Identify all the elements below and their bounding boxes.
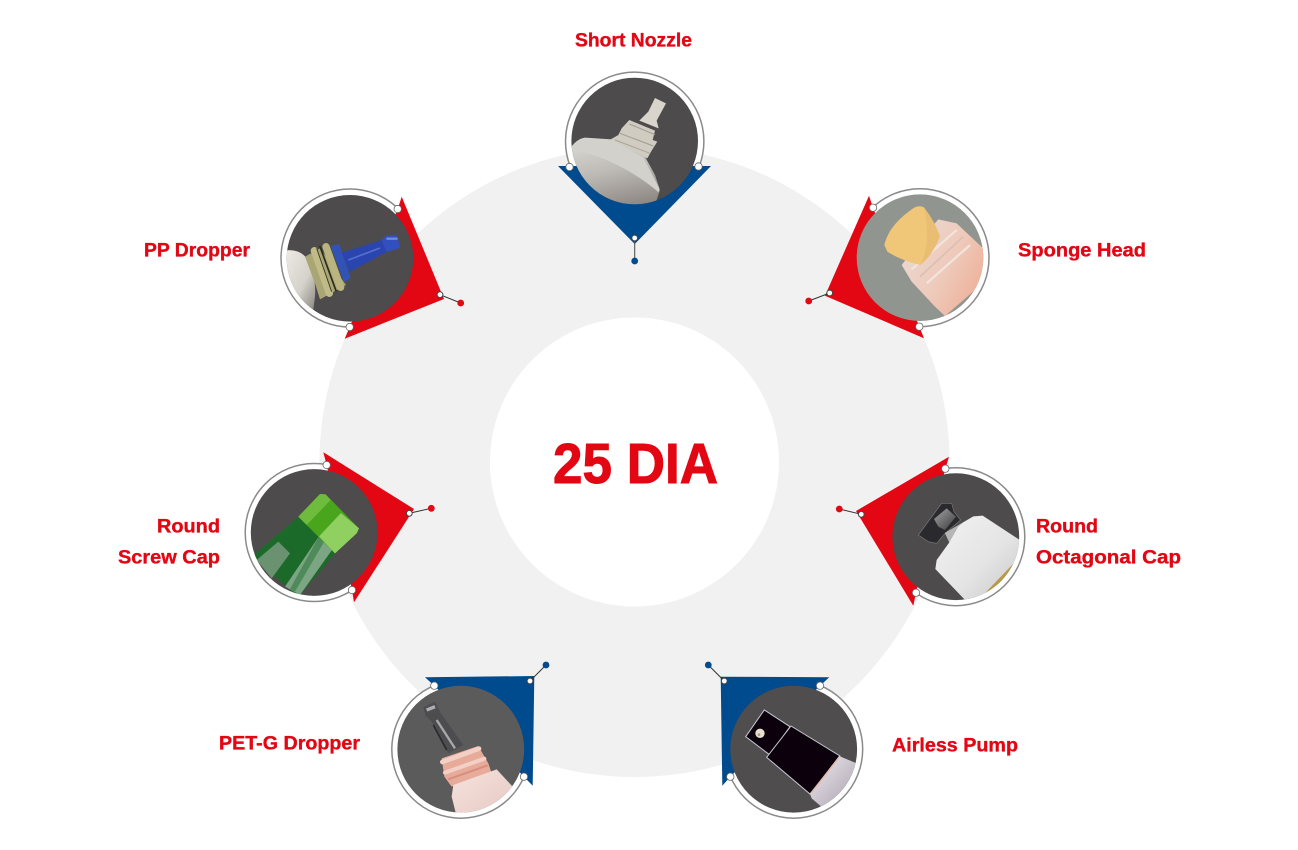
label: screw cap: Screw Cap bbox=[118, 546, 220, 568]
end dot bbox=[631, 258, 638, 264]
node bbox=[721, 678, 727, 684]
node bbox=[727, 773, 734, 780]
panel: short nozzle bbox=[558, 30, 711, 264]
node bbox=[912, 589, 920, 596]
connector bbox=[839, 509, 861, 514]
label: airless pump: Airless Pump bbox=[892, 734, 1018, 756]
node bbox=[520, 773, 528, 780]
pointer triangle bbox=[856, 457, 949, 606]
label: octagonal cap: Octagonal Cap bbox=[1036, 546, 1181, 568]
ring bbox=[851, 189, 989, 327]
panel: PET-G dropper bbox=[219, 662, 549, 818]
node bbox=[566, 163, 573, 171]
panel: round octagonal cap bbox=[836, 457, 1181, 608]
ring bbox=[725, 680, 863, 818]
label: short nozzle: Short Nozzle bbox=[575, 30, 692, 52]
ring bbox=[281, 189, 419, 327]
end dot bbox=[428, 505, 435, 512]
label: round: Round bbox=[157, 516, 220, 538]
pointer triangle bbox=[323, 452, 414, 602]
panel: airless pump bbox=[705, 662, 1018, 818]
node bbox=[632, 235, 638, 241]
donut background bbox=[320, 147, 950, 777]
connector bbox=[409, 508, 431, 513]
end dot bbox=[836, 506, 843, 512]
node bbox=[323, 461, 330, 469]
end dot bbox=[457, 300, 464, 306]
node bbox=[942, 465, 949, 472]
ring bbox=[887, 468, 1025, 606]
label: PP dropper: PP Dropper bbox=[144, 240, 250, 262]
node bbox=[916, 323, 923, 330]
connector bbox=[440, 295, 461, 303]
pointer triangle bbox=[825, 196, 924, 338]
panel: round screw cap bbox=[118, 452, 435, 602]
connector bbox=[809, 293, 830, 301]
product photo: airless pump bbox=[730, 685, 858, 813]
product photo: PET-G dropper bbox=[397, 685, 525, 817]
product photo: sponge head bbox=[856, 194, 987, 322]
node bbox=[437, 292, 443, 298]
product photo: PP dropper bbox=[283, 194, 414, 322]
product photo: green bottle bbox=[250, 468, 378, 597]
pointer triangle bbox=[425, 676, 534, 786]
panel: sponge head bbox=[805, 189, 1146, 338]
connector bbox=[530, 665, 546, 681]
label: sponge head: Sponge Head bbox=[1018, 240, 1146, 262]
pointer triangle bbox=[558, 166, 711, 244]
panel: PP dropper bbox=[144, 189, 464, 339]
node bbox=[394, 205, 401, 213]
pointer triangle bbox=[721, 677, 829, 786]
connector bbox=[708, 665, 724, 681]
ring bbox=[566, 72, 704, 210]
centre title: 25 DIA: 25 DIA bbox=[553, 432, 718, 496]
product photo: short nozzle bbox=[568, 77, 699, 208]
label: round: Round bbox=[1036, 516, 1098, 538]
pointer triangle bbox=[345, 197, 444, 339]
end dot bbox=[705, 662, 712, 668]
end dot bbox=[805, 298, 812, 304]
node bbox=[346, 323, 353, 331]
node bbox=[858, 511, 864, 517]
ring bbox=[245, 464, 383, 602]
node bbox=[431, 682, 438, 689]
end dot bbox=[543, 662, 549, 668]
node bbox=[348, 586, 356, 594]
connector bbox=[634, 238, 636, 261]
node bbox=[869, 204, 877, 211]
node bbox=[527, 678, 533, 684]
node bbox=[406, 510, 412, 516]
label: PET-G dropper: PET-G Dropper bbox=[219, 732, 360, 754]
product photo: octagonal cap bottle bbox=[892, 473, 1020, 600]
node bbox=[695, 163, 702, 170]
ring bbox=[392, 680, 530, 818]
node bbox=[816, 682, 824, 689]
node bbox=[827, 290, 833, 296]
